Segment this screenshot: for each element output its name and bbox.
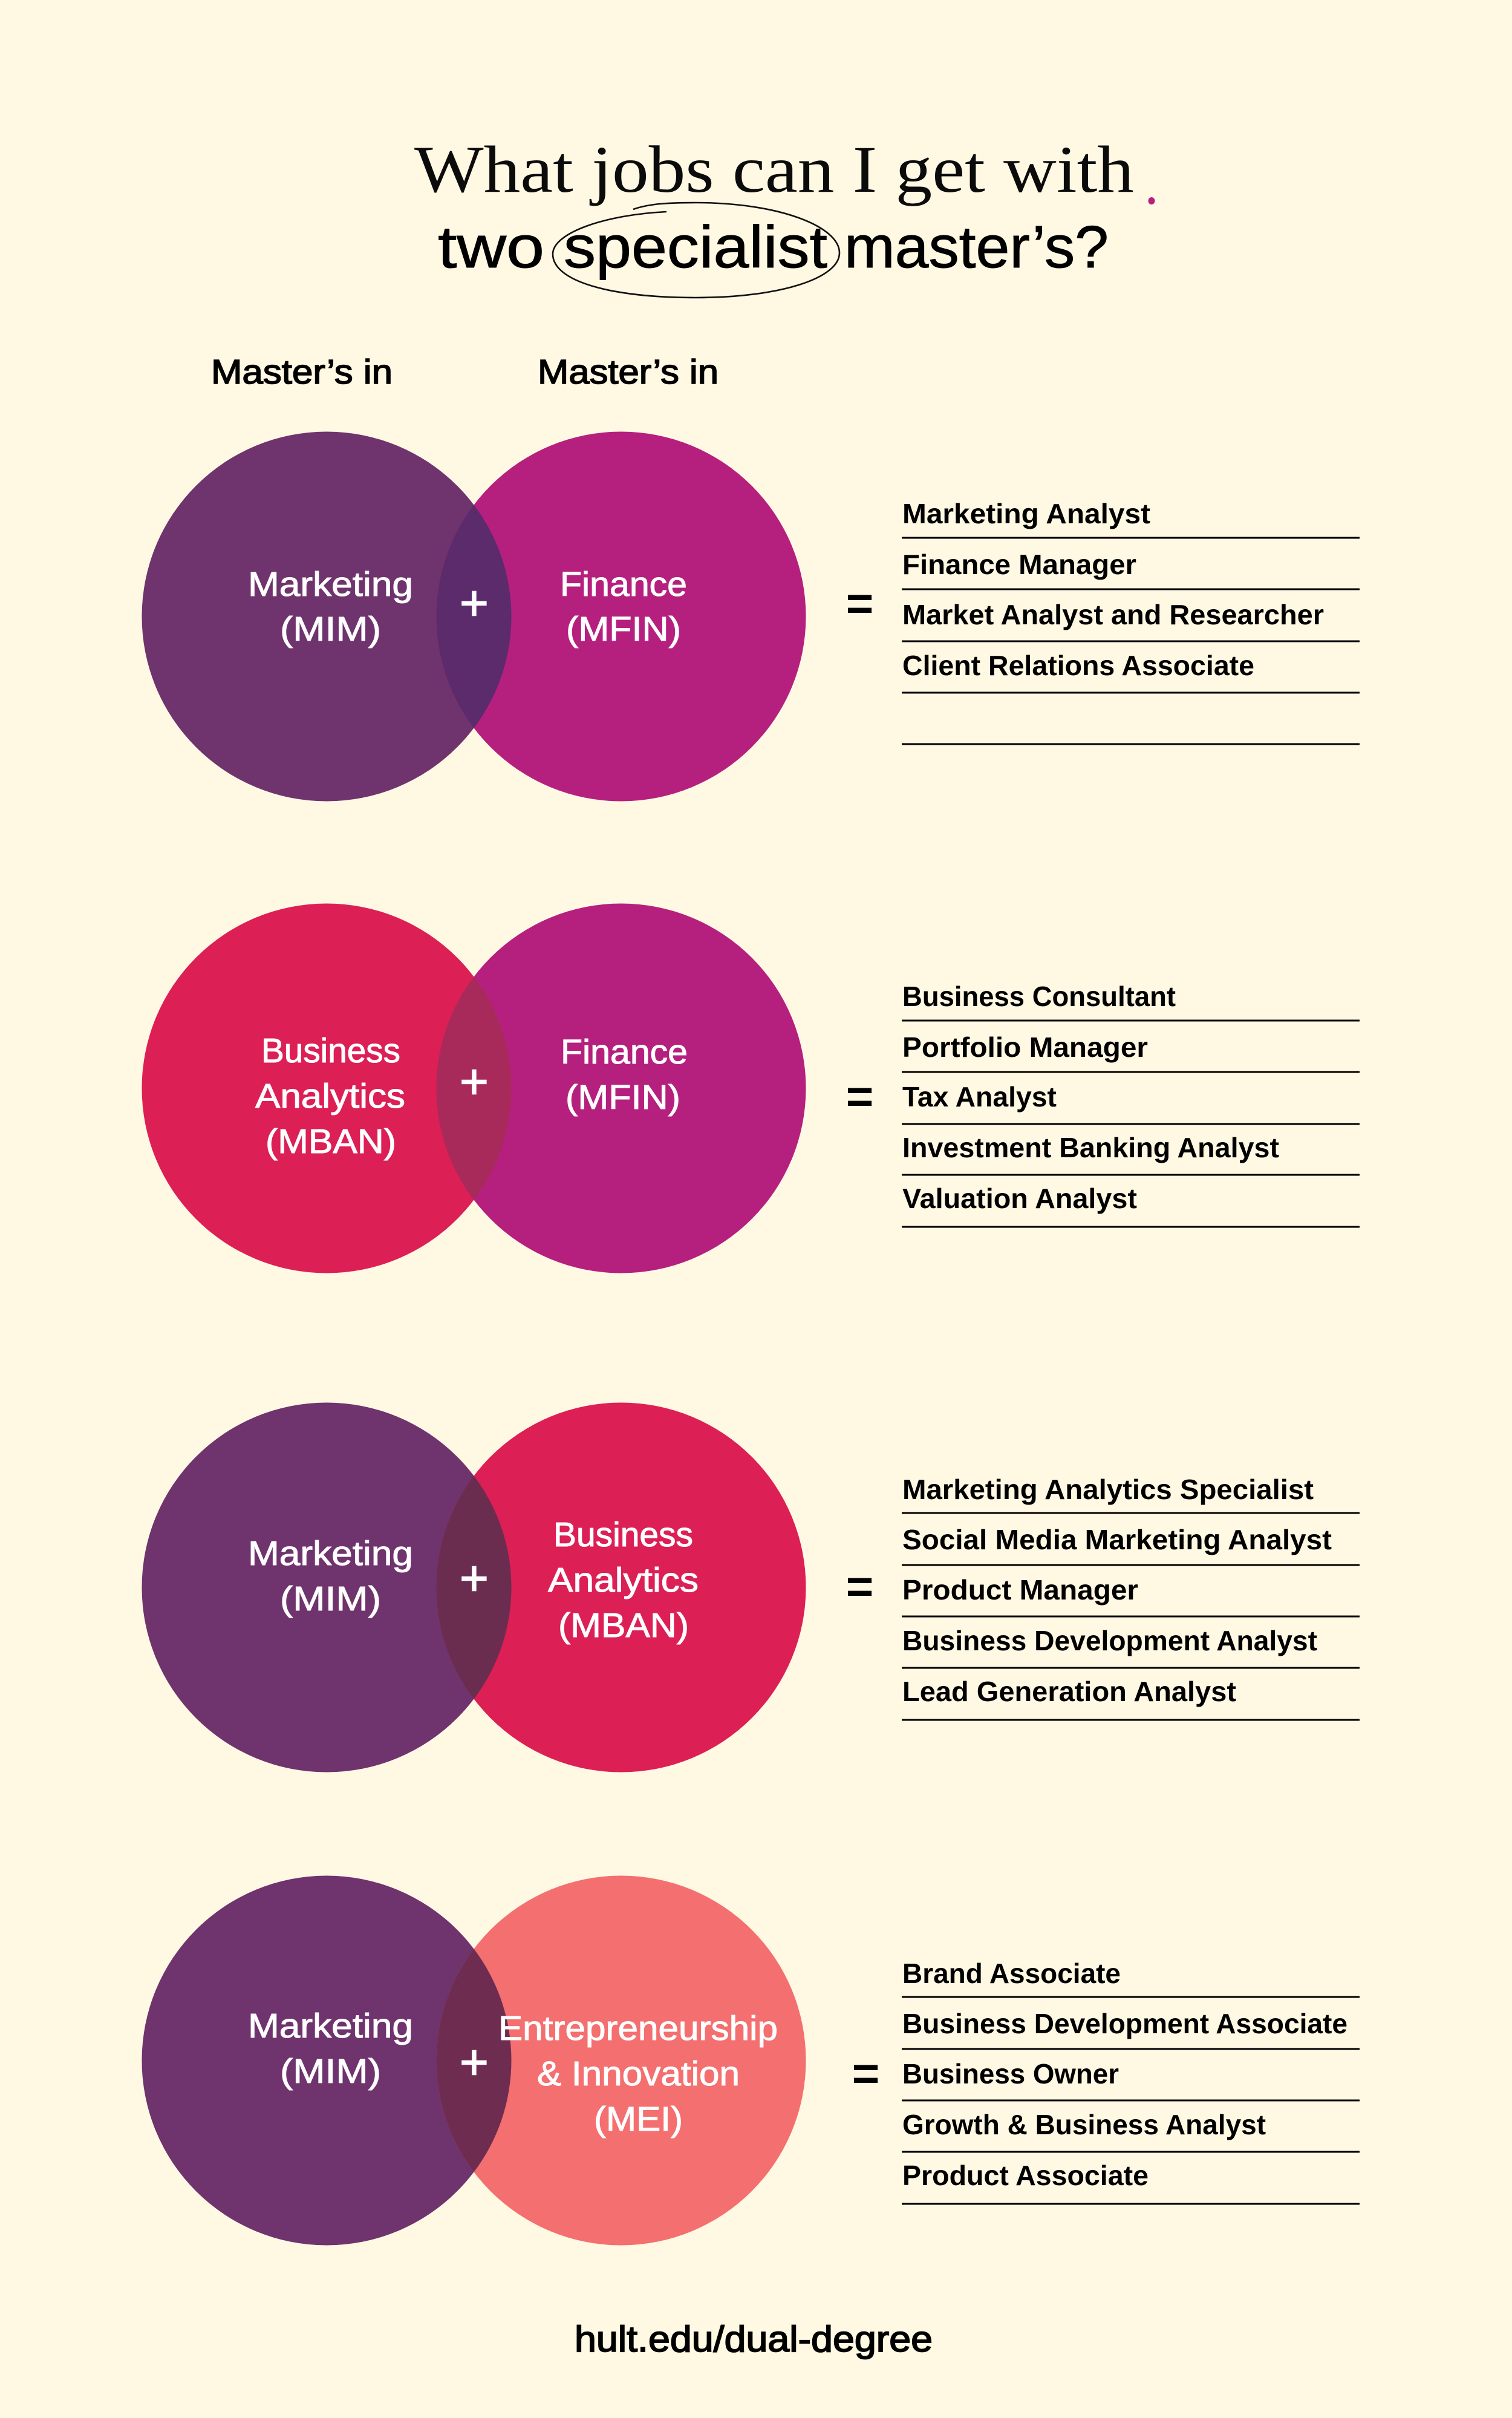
label: entrepreneurship: Entrepreneurship	[498, 2009, 778, 2048]
job: Finance Manager	[902, 549, 1136, 580]
row 4 job list	[902, 1958, 1360, 2204]
label: MFIN: (MFIN)	[565, 1078, 680, 1117]
column heading: right: Master’s in	[538, 353, 719, 391]
label: business: Business	[553, 1515, 693, 1554]
row 4: marketing + entrepreneurship and innovation	[142, 1875, 806, 2246]
circle: marketing	[142, 1875, 512, 2246]
plus sign: +	[460, 1054, 489, 1109]
circle: marketing	[142, 432, 512, 801]
job: Product Associate	[902, 2160, 1149, 2191]
label: MIM: (MIM)	[280, 610, 381, 649]
row 3 job list	[902, 1474, 1360, 1720]
job: Investment Banking Analyst	[902, 1132, 1279, 1163]
label: finance: Finance	[561, 1033, 688, 1071]
circle: finance	[437, 904, 806, 1273]
title line 2: master's: master’s?	[844, 214, 1109, 280]
circle: business analytics	[437, 1402, 806, 1773]
overlap	[436, 976, 512, 1200]
overlap	[436, 505, 512, 728]
label: marketing: Marketing	[248, 2007, 413, 2045]
label: marketing: Marketing	[248, 565, 413, 604]
label: MIM: (MIM)	[280, 2052, 381, 2091]
label: marketing: Marketing	[248, 1534, 413, 1573]
footer url: hult.edu/dual-degree	[575, 2319, 933, 2359]
label: innovation: & Innovation	[537, 2054, 740, 2093]
label: analytics: Analytics	[548, 1561, 699, 1599]
job: Valuation Analyst	[902, 1183, 1137, 1214]
row 1 job list	[902, 498, 1360, 744]
column heading: left: Master’s in	[211, 353, 393, 391]
row 3: marketing + business analytics	[142, 1402, 806, 1773]
row 2: business analytics + finance	[142, 904, 806, 1273]
plus sign: +	[460, 576, 489, 630]
job: Business Consultant	[902, 981, 1176, 1012]
job: Tax Analyst	[902, 1081, 1057, 1113]
circle: entrepreneurship and innovation	[437, 1875, 806, 2246]
job: Business Development Associate	[902, 2008, 1347, 2039]
row 1 equals: =	[846, 577, 873, 630]
job: Marketing Analyst	[902, 498, 1150, 529]
label: MIM: (MIM)	[280, 1580, 381, 1618]
job: Business Development Analyst	[902, 1625, 1317, 1656]
label: finance: Finance	[560, 565, 687, 604]
job: Marketing Analytics Specialist	[902, 1474, 1314, 1505]
row 4 equals: =	[852, 2047, 879, 2100]
job: Client Relations Associate	[902, 650, 1254, 681]
circle: business analytics	[142, 904, 512, 1273]
title line 2: specialist: specialist	[564, 214, 827, 280]
circle: finance	[437, 432, 806, 801]
hand-drawn circle around specialist	[553, 203, 839, 298]
label: analytics: Analytics	[255, 1077, 405, 1116]
overlap	[436, 1949, 512, 2172]
job: Business Owner	[902, 2058, 1119, 2090]
job: Portfolio Manager	[902, 1031, 1148, 1063]
label: MEI: (MEI)	[594, 2100, 683, 2139]
job: Lead Generation Analyst	[902, 1676, 1236, 1707]
job: Brand Associate	[902, 1958, 1121, 1989]
plus sign: +	[460, 2035, 489, 2090]
label: MFIN: (MFIN)	[566, 610, 681, 649]
row 3 equals: =	[846, 1560, 873, 1613]
title	[414, 132, 1155, 298]
plus sign: +	[460, 1551, 489, 1606]
job: Product Manager	[902, 1574, 1138, 1606]
overlap	[436, 1476, 512, 1699]
row 1: marketing + finance	[142, 432, 806, 801]
job: Market Analyst and Researcher	[902, 599, 1324, 630]
circle: marketing	[142, 1402, 512, 1773]
title line 2: two: two	[438, 214, 544, 280]
title line 1: What jobs can I get with	[414, 132, 1134, 206]
job: Growth & Business Analyst	[902, 2109, 1266, 2140]
row 2 equals: =	[846, 1070, 873, 1123]
job: Social Media Marketing Analyst	[902, 1524, 1332, 1555]
label: MBAN: (MBAN)	[558, 1606, 689, 1645]
label: MBAN: (MBAN)	[266, 1122, 396, 1161]
row 2 job list	[902, 981, 1360, 1227]
magenta dot	[1148, 197, 1155, 204]
label: business: Business	[261, 1031, 400, 1070]
